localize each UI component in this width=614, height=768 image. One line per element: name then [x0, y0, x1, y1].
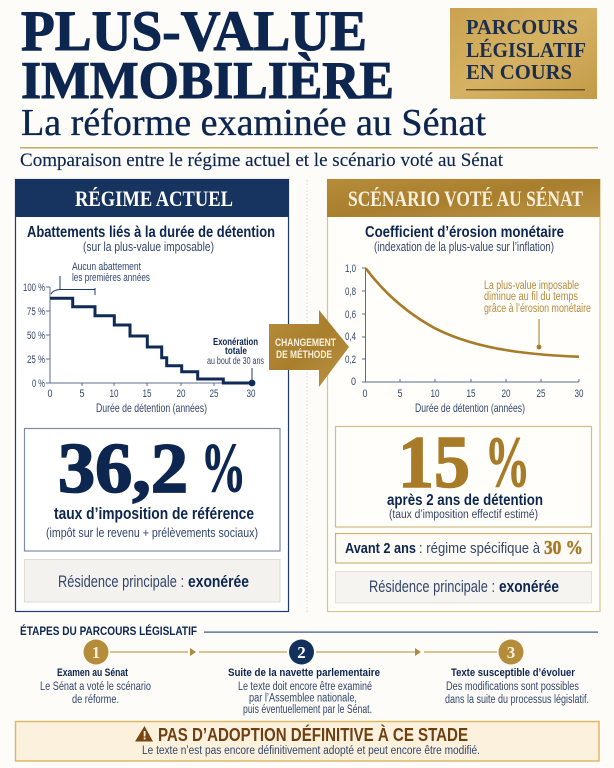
stat box: 15 %: (taux d’imposition effectif estimé)	[389, 509, 538, 521]
step 2: Le texte doit encore être examiné	[238, 681, 372, 693]
step chart: abattements	[23, 282, 256, 415]
badge: parcours législatif: LÉGISLATIF	[466, 38, 586, 62]
annotation: aucun abattement: Aucun abattement	[72, 261, 141, 273]
badge: parcours législatif	[450, 8, 597, 99]
badge: parcours législatif: EN COURS	[466, 60, 572, 84]
step 3: 3	[507, 643, 515, 662]
title	[21, 0, 394, 110]
step chart: abattements: 30	[246, 388, 256, 400]
step chart: abattements: 15	[142, 388, 152, 400]
stat box: 15 %: après 2 ans de détention	[387, 492, 543, 509]
stat box: 36,2 %: %	[201, 430, 246, 507]
callout: résidence principale	[24, 560, 280, 602]
header: régime actuel: RÉGIME ACTUEL	[75, 186, 233, 211]
line chart: coefficient: 0,6	[345, 309, 356, 321]
step 3	[445, 640, 589, 706]
title: IMMOBILIÈRE	[21, 52, 394, 110]
step 2: Suite de la navette parlementaire	[228, 667, 380, 679]
chart heading: coefficient: Coefficient d’érosion monétaire	[365, 224, 564, 241]
step 1: Examen au Sénat	[57, 667, 128, 679]
chart heading: abattements: (sur la plus-value imposable)	[83, 239, 214, 254]
callout: avant 2 ans: : régime spécifique à	[419, 540, 541, 557]
line chart: coefficient: 5	[398, 388, 402, 400]
arrow: changement de méthode: CHANGEMENT	[275, 337, 336, 349]
annotation: érosion monétaire	[484, 280, 591, 349]
header: scénario voté	[327, 179, 600, 217]
annotation: érosion monétaire: diminue au fil du temps	[484, 291, 578, 303]
panel: régime actuel	[15, 179, 289, 612]
line chart: coefficient: 0	[362, 388, 368, 400]
step 2: puis éventuellement par le Sénat.	[243, 704, 372, 716]
step 3: Des modifications sont possibles	[446, 681, 579, 693]
stat box: 15 %: %	[485, 422, 530, 502]
callout: avant 2 ans	[336, 534, 592, 563]
step chart: abattements: 20	[176, 388, 186, 400]
arrow: changement de méthode	[269, 310, 349, 387]
alert banner: Le texte n’est pas encore définitivement adopté et peut encore être modifié.	[142, 745, 480, 757]
step 1: 1	[92, 643, 100, 662]
annotation: exonération totale	[207, 337, 264, 382]
title: PLUS-VALUE	[21, 0, 367, 63]
step 3: Texte susceptible d’évoluer	[451, 667, 576, 679]
stat box: 15 %	[336, 422, 592, 527]
annotation: érosion monétaire: La plus-value imposable	[484, 280, 579, 292]
stat box: 15 %: 15	[398, 422, 470, 504]
callout: avant 2 ans: 30 %	[544, 537, 583, 559]
panel: scénario voté au Sénat	[327, 179, 600, 612]
step chart: abattements: 5	[80, 388, 84, 400]
stat box: 36,2 %: (impôt sur le revenu + prélèvements sociaux)	[46, 525, 258, 540]
step 1	[40, 640, 151, 706]
line chart: coefficient: 15	[466, 388, 476, 400]
step chart: abattements: 25 %	[27, 354, 45, 366]
subtitle: La réforme examinée au Sénat	[21, 102, 486, 144]
chart heading: abattements	[27, 224, 275, 254]
icon: warning triangle	[135, 726, 153, 742]
callout: résidence principale: exonérée	[188, 572, 249, 591]
annotation: aucun abattement: les premières années	[72, 272, 150, 284]
step 2: par l’Assemblee nationale,	[249, 692, 357, 704]
line chart: coefficient: 0,8	[345, 286, 356, 298]
badge: parcours législatif: PARCOURS	[466, 15, 578, 39]
section heading: étapes: ÉTAPES DU PARCOURS LÉGISLATIF	[20, 623, 197, 638]
step chart: abattements: 75 %	[27, 306, 45, 318]
line chart: coefficient	[345, 263, 584, 415]
line chart: coefficient: 0,4	[345, 331, 356, 343]
line chart: coefficient: 0	[351, 376, 356, 388]
step chart: abattements: 25	[210, 388, 218, 400]
step 1: de réforme.	[72, 694, 119, 706]
header: régime actuel	[15, 179, 289, 217]
stat box: 36,2 %	[24, 428, 280, 551]
step 1: Le Sénat a voté le scénario	[40, 681, 151, 693]
line chart: coefficient: 25	[536, 388, 546, 400]
line chart: coefficient: 0,2	[345, 354, 356, 366]
step chart: abattements: 100 %	[23, 282, 45, 294]
callout: résidence principale: Résidence principale :	[58, 572, 184, 591]
step 2: 2	[297, 643, 306, 662]
step chart: abattements: 0	[48, 388, 52, 400]
alert banner: PAS D’ADOPTION DÉFINITIVE À CE STADE	[158, 724, 468, 745]
arrow: changement de méthode: DE MÉTHODE	[276, 348, 332, 361]
step chart: abattements: 10	[110, 388, 118, 400]
chart heading: abattements: Abattements liés à la durée de détention	[27, 224, 275, 241]
line chart: coefficient: Durée de détention (années)	[415, 401, 525, 415]
timeline connectors	[110, 648, 497, 656]
callout: résidence principale: Résidence principale :	[369, 578, 495, 596]
chart heading: coefficient	[365, 224, 564, 254]
alert banner	[16, 722, 599, 761]
step chart: abattements: Durée de détention (années)	[96, 401, 207, 415]
step chart: abattements: 0 %	[32, 378, 45, 390]
callout: résidence principale: exonérée	[499, 578, 559, 596]
line chart: coefficient: 30	[574, 388, 584, 400]
line chart: coefficient: 1,0	[345, 263, 356, 275]
callout: avant 2 ans: Avant 2 ans	[345, 540, 416, 557]
annotation: exonération totale: Exonération	[213, 337, 258, 348]
comparison line: Comparaison entre le régime actuel et le scénario voté au Sénat	[20, 150, 504, 171]
callout: résidence principale	[336, 572, 592, 603]
line chart: coefficient: 20	[502, 388, 510, 400]
stat box: 36,2 %: 36,2	[58, 430, 188, 508]
annotation: exonération totale: totale	[225, 346, 247, 357]
line chart: coefficient: 10	[430, 388, 440, 400]
step chart: abattements: 50 %	[27, 330, 45, 342]
chart heading: coefficient: (indexation de la plus-value sur l’inflation)	[374, 239, 554, 254]
annotation: aucun abattement	[51, 261, 150, 295]
dotted divider	[306, 180, 308, 612]
step 2	[228, 640, 380, 716]
annotation: exonération totale: au bout de 30 ans	[207, 356, 264, 367]
stat box: 36,2 %: taux d’imposition de référence	[54, 505, 254, 523]
